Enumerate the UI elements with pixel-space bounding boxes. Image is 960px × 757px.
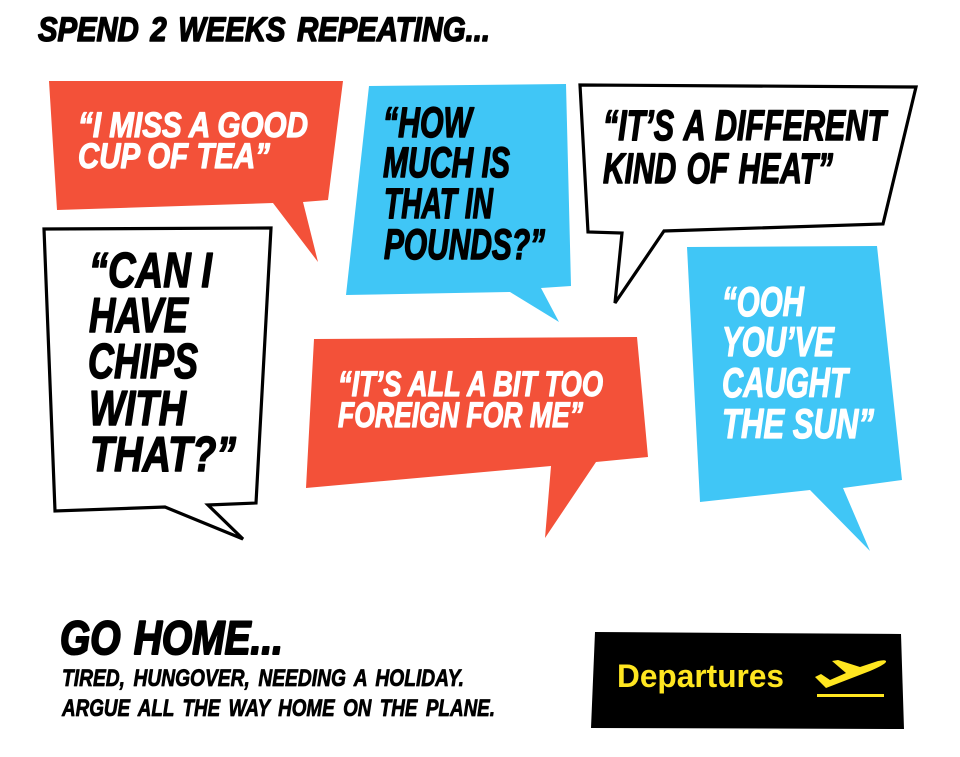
quote text: caught the sun xyxy=(722,278,874,447)
bubble shape: blue xyxy=(346,84,571,322)
quote text: pounds: THAT IN xyxy=(384,180,494,228)
quote text: foreign: FOREIGN FOR ME” xyxy=(338,396,583,435)
quote text: caught the sun: “OOH xyxy=(722,278,805,325)
quote text: different heat: KIND OF HEAT” xyxy=(603,145,833,193)
quote text: pounds: POUNDS?” xyxy=(384,221,545,269)
quote text: pounds: MUCH IS xyxy=(383,139,510,187)
quote text: chips: HAVE xyxy=(89,289,189,343)
text block: go home details: TIRED, HUNGOVER, NEEDING A HOLIDAY. xyxy=(62,665,464,692)
speech bubble: cup of tea xyxy=(49,81,343,262)
bubble shape: blue xyxy=(687,246,902,551)
heading: spend 2 weeks repeating: SPEND 2 WEEKS REPEATING... xyxy=(38,11,490,49)
quote text: cup of tea xyxy=(78,106,308,176)
quote text: cup of tea: CUP OF TEA” xyxy=(78,137,270,176)
quote text: chips: CHIPS xyxy=(88,335,198,389)
sign background xyxy=(591,632,904,729)
quote text: chips: THAT?” xyxy=(90,428,236,482)
quote text: foreign xyxy=(338,365,603,435)
bubble shape: white outlined xyxy=(44,228,271,539)
quote text: pounds: “HOW xyxy=(383,99,474,147)
quote text: different heat xyxy=(603,102,889,193)
quote text: foreign: “IT’S ALL A BIT TOO xyxy=(338,365,603,404)
quote text: chips: “CAN I xyxy=(89,244,213,298)
quote text: cup of tea: “I MISS A GOOD xyxy=(78,106,308,145)
quote text: pounds xyxy=(383,99,545,269)
speech bubble: different heat xyxy=(580,85,916,303)
bubble shape: red xyxy=(306,337,648,538)
sign label: Departures xyxy=(617,658,784,694)
quote text: caught the sun: THE SUN” xyxy=(722,400,874,447)
bubble shape: white outlined xyxy=(580,85,916,303)
speech bubble: caught the sun xyxy=(687,246,902,551)
speech bubble: pounds xyxy=(346,84,571,322)
heading: go home: GO HOME... xyxy=(60,611,283,664)
icon: plane taking off xyxy=(815,660,886,697)
speech bubble: foreign xyxy=(306,337,648,538)
text block: go home details: ARGUE ALL THE WAY HOME ON THE PLANE. xyxy=(61,695,495,722)
bubble shape: red xyxy=(49,81,343,262)
departures sign xyxy=(591,632,904,729)
text block: go home details xyxy=(61,665,495,722)
speech bubble: chips xyxy=(44,228,271,539)
quote text: chips: WITH xyxy=(89,382,187,436)
quote text: caught the sun: YOU’VE xyxy=(722,318,835,365)
quote text: chips xyxy=(88,244,236,482)
quote text: caught the sun: CAUGHT xyxy=(722,359,850,406)
